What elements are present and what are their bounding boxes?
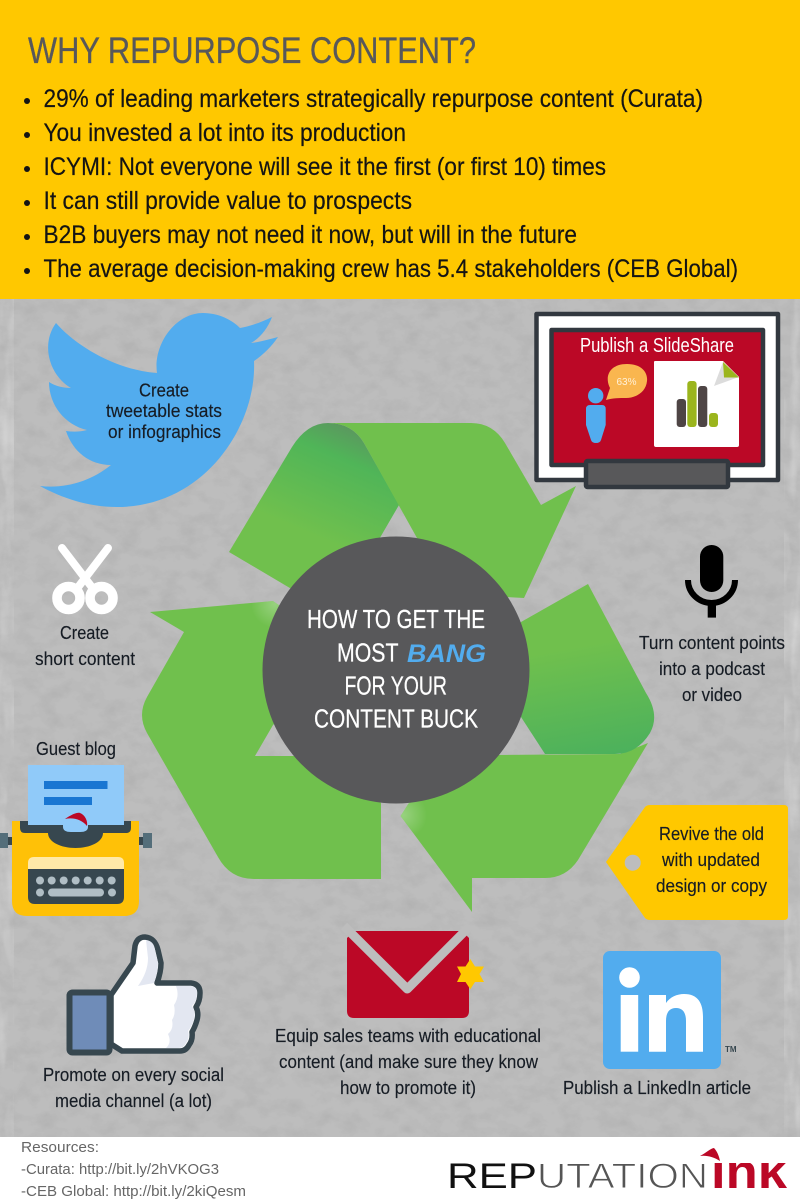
logo: reputation ink: ink: [711, 1146, 787, 1199]
icon: typewriter with guest blog label: Guest blog: [36, 739, 116, 759]
person: [586, 388, 606, 443]
icon: thumbs up with label: Promote on every social: [43, 1065, 224, 1085]
icon: twitter bird with label: or infographics: [108, 422, 221, 442]
resources text: -Curata: http://bit.ly/2hVKOG3: [21, 1161, 219, 1178]
icon: scissors with label: Create: [60, 623, 109, 643]
icon: linkedin logo with label: [563, 951, 751, 1098]
icon: scissors with label: [35, 548, 135, 669]
icon: twitter bird with label: Create: [139, 380, 189, 400]
icon: microphone with label: into a podcast: [659, 659, 765, 679]
icon: twitter bird with label: [40, 313, 278, 507]
icon: microphone with label: Turn content points: [639, 633, 785, 653]
icon: thumbs up with label: [43, 937, 224, 1111]
icon: twitter bird with label: tweetable stats: [106, 401, 222, 421]
logo: reputation ink: REP: [447, 1157, 537, 1196]
bullet list: B2B buyers may not need it now, but will in the future: [44, 221, 577, 249]
icon: tag with label: design or copy: [656, 876, 767, 896]
panel: center circle: BANG: [407, 640, 486, 668]
icon: envelope with label: content (and make sure they know: [279, 1052, 539, 1072]
panel: center circle: MOST: [337, 638, 399, 668]
logo: reputation ink: UTATION: [537, 1157, 708, 1196]
document with bar chart: [654, 361, 739, 447]
resources text: Resources:: [21, 1139, 99, 1156]
icon: scissors with label: short content: [35, 649, 135, 669]
icon: envelope with label: [275, 926, 541, 1098]
panel: center circle: FOR YOUR: [344, 670, 447, 700]
bullet list: You invested a lot into its production: [44, 119, 406, 147]
icon: envelope with label: how to promote it): [340, 1078, 476, 1098]
icon: linkedin logo with label: Publish a LinkedIn article: [563, 1078, 751, 1098]
resources text: [21, 1139, 246, 1200]
icon: tag with label: [606, 805, 788, 920]
icon: envelope with label: Equip sales teams with educational: [275, 1026, 541, 1046]
icon: recycling arrows: [142, 423, 654, 912]
heading: WHY REPURPOSE CONTENT?: [28, 30, 476, 71]
panel: why repurpose content header: [0, 0, 800, 299]
icon: typewriter with guest blog label: [0, 739, 152, 916]
icon: tag with label: with updated: [661, 850, 760, 870]
icon: slideshare presentation screen: [536, 314, 778, 487]
panel: center circle: CONTENT BUCK: [314, 704, 479, 734]
speech bubble: 63%: [616, 377, 637, 388]
speech bubble: [606, 364, 647, 400]
panel: concrete background: [0, 299, 800, 1137]
bullet list: It can still provide value to prospects: [44, 187, 412, 215]
bullet list: [24, 85, 738, 283]
icon: microphone with label: or video: [682, 685, 742, 705]
logo: reputation ink: [450, 1148, 787, 1188]
icon: slideshare presentation screen: Publish a SlideShare: [580, 335, 734, 357]
icon: microphone with label: [639, 545, 785, 705]
icon: tag with label: Revive the old: [659, 824, 764, 844]
bullet list: 29% of leading marketers strategically repurpose content (Curata): [44, 85, 703, 113]
panel: center circle: HOW TO GET THE: [307, 604, 485, 634]
panel: center circle: [262, 536, 530, 804]
bullet list: The average decision-making crew has 5.4 stakeholders (CEB Global): [44, 255, 738, 283]
star badge: [457, 959, 484, 989]
resources text: -CEB Global: http://bit.ly/2kiQesm: [21, 1183, 246, 1200]
bullet list: ICYMI: Not everyone will see it the first (or first 10) times: [44, 153, 606, 181]
icon: thumbs up with label: media channel (a lot): [55, 1091, 212, 1111]
panel: footer: [22, 1142, 787, 1199]
icon: linkedin logo with label: TM: [725, 1045, 737, 1054]
